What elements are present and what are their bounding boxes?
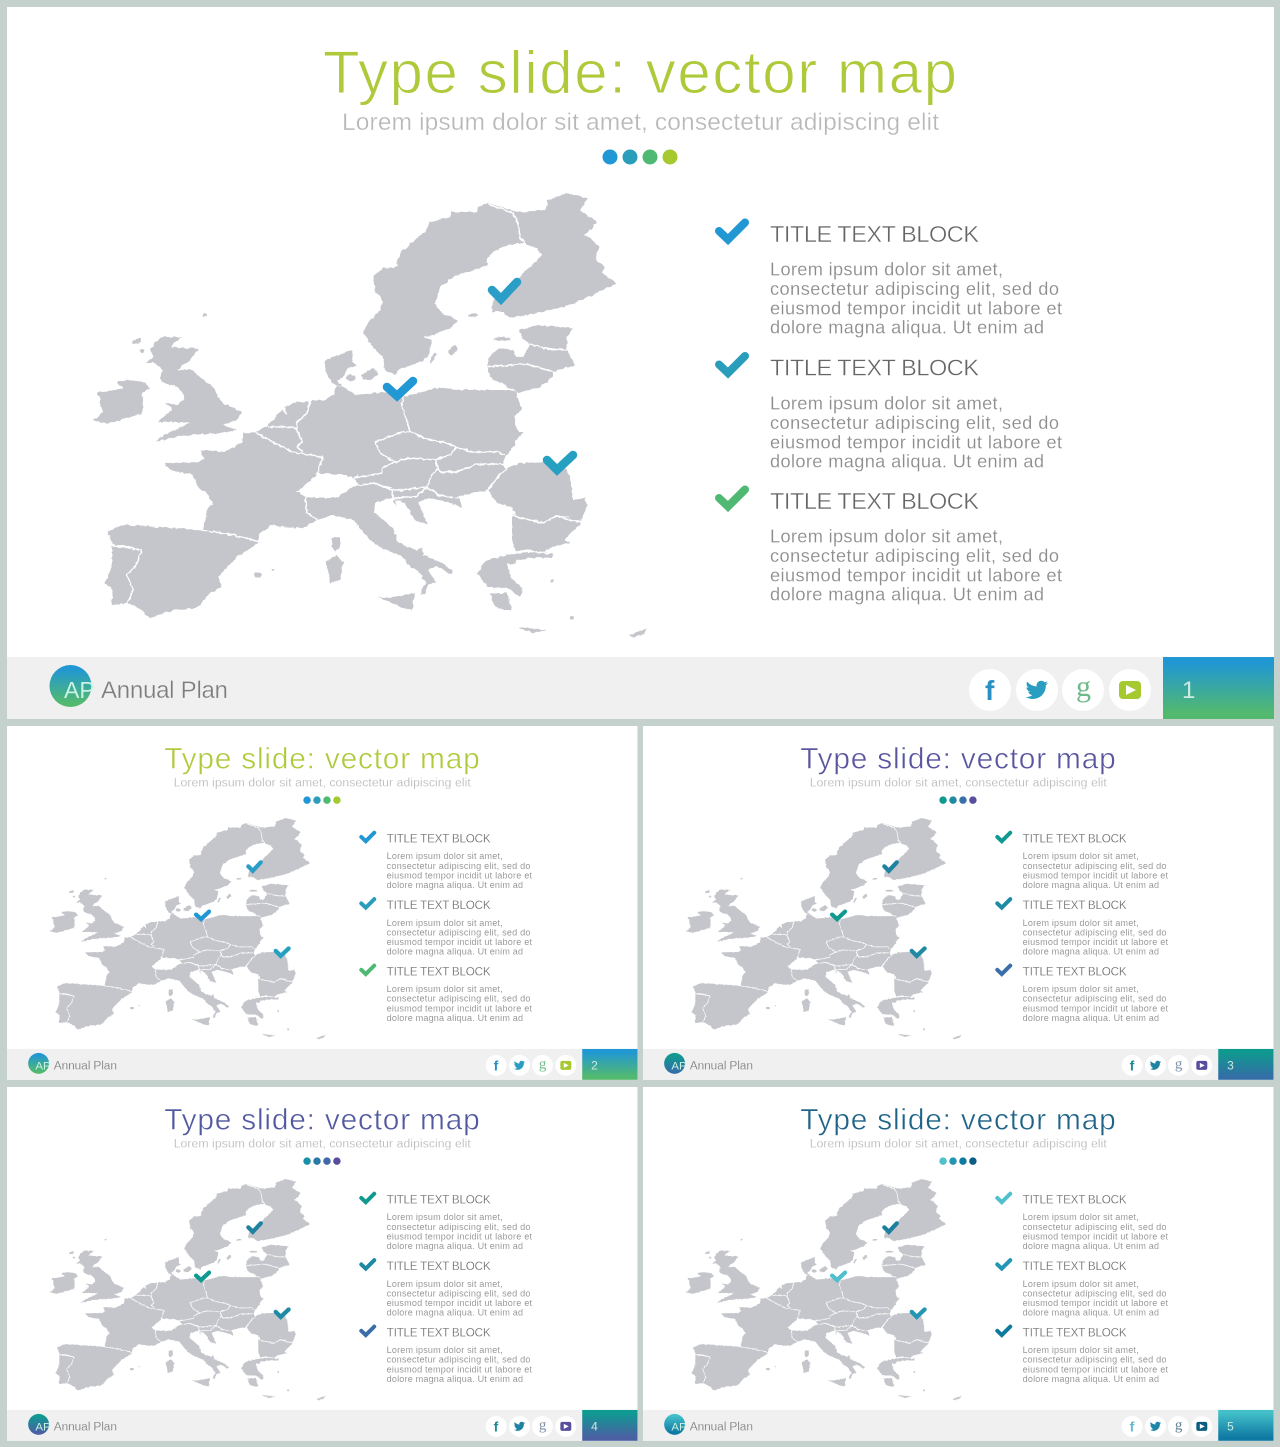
body 3: eiusmod tempor incidit ut labore et (770, 566, 1062, 586)
slide 5 background (643, 1087, 1273, 1441)
map check: Finland (492, 282, 517, 299)
icon: twitter (1016, 669, 1058, 711)
body 1: eiusmod tempor incidit ut labore et (770, 298, 1062, 318)
slide 3 text blocks: eiusmod tempor incidit ut labore et (1023, 1003, 1168, 1013)
slide 1 subtitle: Lorem ipsum dolor sit amet, consectetur adipiscing elit (342, 109, 939, 136)
icon: video (1109, 669, 1151, 711)
slide 3 text blocks: consectetur adipiscing elit, sed do (1023, 861, 1166, 871)
slide 2 text blocks: dolore magna aliqua. Ut enim ad (387, 1013, 523, 1023)
slide 4 text blocks: consectetur adipiscing elit, sed do (387, 1355, 530, 1365)
slide 3 footer: 3 (1227, 1058, 1234, 1072)
slide 4 text blocks: Lorem ipsum dolor sit amet, (387, 1212, 503, 1222)
slide 5 subtitle: Lorem ipsum dolor sit amet, consectetur adipiscing elit (810, 1137, 1107, 1151)
slide 2 text blocks: TITLE TEXT BLOCK (387, 965, 491, 978)
slide 2 text blocks: eiusmod tempor incidit ut labore et (387, 937, 532, 947)
body 3: dolore magna aliqua. Ut enim ad (770, 584, 1044, 604)
heading 2: TITLE TEXT BLOCK (770, 354, 979, 380)
slide 3 text blocks: TITLE TEXT BLOCK (1023, 832, 1127, 845)
slide 3 text blocks: eiusmod tempor incidit ut labore et (1023, 871, 1168, 881)
slide 2 text blocks: consectetur adipiscing elit, sed do (387, 861, 530, 871)
slide 4 text blocks: dolore magna aliqua. Ut enim ad (387, 1308, 523, 1318)
slide 5 text blocks (997, 1193, 1168, 1384)
slide 2 footer: 2 (591, 1058, 598, 1072)
slide 3 title: Type slide: vector map (800, 742, 1116, 775)
icon: facebook: f (985, 675, 995, 706)
slide 4 footer: Annual Plan (54, 1419, 117, 1433)
slide 4 footer: f (494, 1418, 499, 1434)
slide 4 map checks (196, 1223, 289, 1317)
slide 5 text blocks: consectetur adipiscing elit, sed do (1023, 1222, 1166, 1232)
brand name: Annual Plan (101, 677, 228, 704)
slide 3 text blocks: consectetur adipiscing elit, sed do (1023, 994, 1166, 1004)
slide 5 text blocks: eiusmod tempor incidit ut labore et (1023, 1298, 1168, 1308)
slide 3 text blocks (997, 832, 1168, 1023)
slide 5 text blocks: consectetur adipiscing elit, sed do (1023, 1288, 1166, 1298)
body 1: consectetur adipiscing elit, sed do (770, 279, 1059, 299)
slide 5 dots (939, 1157, 977, 1165)
slide 2 title: Type slide: vector map (164, 742, 480, 775)
icon: check 3 (719, 490, 745, 506)
slide 3 text blocks: dolore magna aliqua. Ut enim ad (1023, 947, 1159, 957)
slide 3 text blocks: eiusmod tempor incidit ut labore et (1023, 937, 1168, 947)
body 2: consectetur adipiscing elit, sed do (770, 413, 1059, 433)
slide 2 text blocks: TITLE TEXT BLOCK (387, 899, 491, 912)
slide 3 text blocks: dolore magna aliqua. Ut enim ad (1023, 880, 1159, 890)
slide 4 text blocks: consectetur adipiscing elit, sed do (387, 1222, 530, 1232)
slide 5 text blocks: Lorem ipsum dolor sit amet, (1023, 1212, 1139, 1222)
slide 2 map (50, 818, 325, 1039)
slide 4 text blocks: dolore magna aliqua. Ut enim ad (387, 1374, 523, 1384)
slide 2 text blocks: TITLE TEXT BLOCK (387, 832, 491, 845)
body 1: dolore magna aliqua. Ut enim ad (770, 318, 1044, 338)
body 3 (770, 526, 1062, 604)
slide 2 footer (7, 1049, 637, 1080)
slide 4 text blocks: eiusmod tempor incidit ut labore et (387, 1298, 532, 1308)
slide 5 footer: f (1130, 1418, 1135, 1434)
slide 4 text blocks: TITLE TEXT BLOCK (387, 1260, 491, 1273)
slide 2 footer: Annual Plan (54, 1058, 117, 1072)
slide 1 background (7, 7, 1274, 719)
slide 2 text blocks: eiusmod tempor incidit ut labore et (387, 1003, 532, 1013)
slide 4 text blocks: Lorem ipsum dolor sit amet, (387, 1279, 503, 1289)
icon: check 2 (719, 356, 745, 373)
slide 4 footer: 4 (591, 1419, 598, 1433)
slide 4 footer (7, 1410, 637, 1441)
icon: google (1062, 669, 1104, 711)
slide 4 text blocks: TITLE TEXT BLOCK (387, 1193, 491, 1206)
slide 1 Europe map (93, 193, 647, 637)
slide 5 text blocks: dolore magna aliqua. Ut enim ad (1023, 1308, 1159, 1318)
body 2: dolore magna aliqua. Ut enim ad (770, 452, 1044, 472)
slide 5 text blocks: TITLE TEXT BLOCK (1023, 1193, 1127, 1206)
slide 3 footer: f (1130, 1057, 1135, 1073)
slide 4 dots (303, 1157, 341, 1165)
slide 2 map checks (196, 862, 289, 956)
slide 5 text blocks: consectetur adipiscing elit, sed do (1023, 1355, 1166, 1365)
page number box (1163, 657, 1274, 719)
text block 2 (719, 354, 1062, 472)
slide 2 text blocks: Lorem ipsum dolor sit amet, (387, 918, 503, 928)
body 2 (770, 394, 1062, 472)
heading 1: TITLE TEXT BLOCK (770, 221, 979, 247)
logo AP (50, 665, 95, 707)
slide 4 text blocks (361, 1193, 532, 1384)
slide 1 title: Type slide: vector map (323, 39, 957, 106)
slide 3 text blocks: consectetur adipiscing elit, sed do (1023, 927, 1166, 937)
slide 5 text blocks: Lorem ipsum dolor sit amet, (1023, 1279, 1139, 1289)
slide 2 text blocks: consectetur adipiscing elit, sed do (387, 927, 530, 937)
slide 2 text blocks: dolore magna aliqua. Ut enim ad (387, 880, 523, 890)
slide 4 text blocks: consectetur adipiscing elit, sed do (387, 1288, 530, 1298)
slide 4 text blocks: eiusmod tempor incidit ut labore et (387, 1364, 532, 1374)
slide 5 text blocks: eiusmod tempor incidit ut labore et (1023, 1364, 1168, 1374)
slide 3 footer (643, 1049, 1273, 1080)
slide 3 map checks (832, 862, 925, 956)
slide 5 text blocks: eiusmod tempor incidit ut labore et (1023, 1232, 1168, 1242)
slide 2 footer: g (539, 1056, 547, 1072)
slide 4 (7, 1087, 637, 1441)
slide 2 dots (303, 796, 341, 804)
slide 1 dots (602, 150, 678, 164)
body 2: Lorem ipsum dolor sit amet, (770, 394, 1003, 414)
text block 3 (719, 488, 1062, 604)
heading 3: TITLE TEXT BLOCK (770, 488, 979, 514)
slide 5 footer: Annual Plan (690, 1419, 753, 1433)
slide 2 text blocks: dolore magna aliqua. Ut enim ad (387, 947, 523, 957)
slide 5 footer: AP (671, 1421, 687, 1433)
body 1: Lorem ipsum dolor sit amet, (770, 260, 1003, 280)
slide 2 text blocks: eiusmod tempor incidit ut labore et (387, 871, 532, 881)
slide 2 background (7, 726, 637, 1080)
slide 5 map (686, 1179, 961, 1400)
slide 3 text blocks: TITLE TEXT BLOCK (1023, 899, 1127, 912)
slide 4 title: Type slide: vector map (164, 1103, 480, 1136)
slide 2 footer: AP (35, 1060, 51, 1072)
body 2: eiusmod tempor incidit ut labore et (770, 432, 1062, 452)
slide 2 footer: f (494, 1057, 499, 1073)
slide 5 text blocks: dolore magna aliqua. Ut enim ad (1023, 1241, 1159, 1251)
page number box: 1 (1182, 677, 1195, 704)
slide 3 text blocks: dolore magna aliqua. Ut enim ad (1023, 1013, 1159, 1023)
slide 4 footer: g (539, 1417, 547, 1433)
slide 4 text blocks: eiusmod tempor incidit ut labore et (387, 1232, 532, 1242)
slide 2 text blocks: consectetur adipiscing elit, sed do (387, 994, 530, 1004)
slide 5 footer: 5 (1227, 1419, 1234, 1433)
slide 4 subtitle: Lorem ipsum dolor sit amet, consectetur adipiscing elit (174, 1137, 471, 1151)
slide 3 text blocks: Lorem ipsum dolor sit amet, (1023, 851, 1139, 861)
slide 4 text blocks: dolore magna aliqua. Ut enim ad (387, 1241, 523, 1251)
slide 3 text blocks: TITLE TEXT BLOCK (1023, 965, 1127, 978)
map check: Romania (547, 455, 573, 470)
slide 3 text blocks: Lorem ipsum dolor sit amet, (1023, 984, 1139, 994)
icon: facebook (969, 669, 1011, 711)
slide 4 map (50, 1179, 325, 1400)
slide 5 map checks (832, 1223, 925, 1317)
slide 5 footer: g (1175, 1417, 1183, 1433)
slide 2 (7, 726, 637, 1080)
icon: google: g (1076, 670, 1091, 703)
slide 2 text blocks (361, 832, 532, 1023)
slide 3 dots (939, 796, 977, 804)
slide 4 background (7, 1087, 637, 1441)
slide 3 footer: Annual Plan (690, 1058, 753, 1072)
slide 5 footer (643, 1410, 1273, 1441)
body 3: Lorem ipsum dolor sit amet, (770, 526, 1003, 546)
slide 5 text blocks: TITLE TEXT BLOCK (1023, 1326, 1127, 1339)
footer bar (7, 657, 1274, 719)
body 3: consectetur adipiscing elit, sed do (770, 546, 1059, 566)
slide 3 background (643, 726, 1273, 1080)
slide 1: main (7, 7, 1274, 719)
slide 3 text blocks: Lorem ipsum dolor sit amet, (1023, 918, 1139, 928)
slide 5 title: Type slide: vector map (800, 1103, 1116, 1136)
slide 2 subtitle: Lorem ipsum dolor sit amet, consectetur adipiscing elit (174, 776, 471, 790)
body 1 (770, 260, 1062, 338)
logo AP: AP (64, 677, 95, 703)
slide 5 text blocks: TITLE TEXT BLOCK (1023, 1260, 1127, 1273)
slide 3 (643, 726, 1273, 1080)
slide 3 subtitle: Lorem ipsum dolor sit amet, consectetur adipiscing elit (810, 776, 1107, 790)
map check: Germany (387, 381, 413, 396)
slide 4 text blocks: Lorem ipsum dolor sit amet, (387, 1345, 503, 1355)
slide 3 footer: AP (671, 1060, 687, 1072)
slide 3 footer: g (1175, 1056, 1183, 1072)
slide 5 (643, 1087, 1273, 1441)
slide 5 text blocks: dolore magna aliqua. Ut enim ad (1023, 1374, 1159, 1384)
slide 3 map (686, 818, 961, 1039)
icon: check 1 (719, 222, 745, 240)
slide 4 text blocks: TITLE TEXT BLOCK (387, 1326, 491, 1339)
slide 2 text blocks: Lorem ipsum dolor sit amet, (387, 984, 503, 994)
text block 1 (719, 221, 1062, 338)
slide 2 text blocks: Lorem ipsum dolor sit amet, (387, 851, 503, 861)
slide 5 text blocks: Lorem ipsum dolor sit amet, (1023, 1345, 1139, 1355)
slide 4 footer: AP (35, 1421, 51, 1433)
